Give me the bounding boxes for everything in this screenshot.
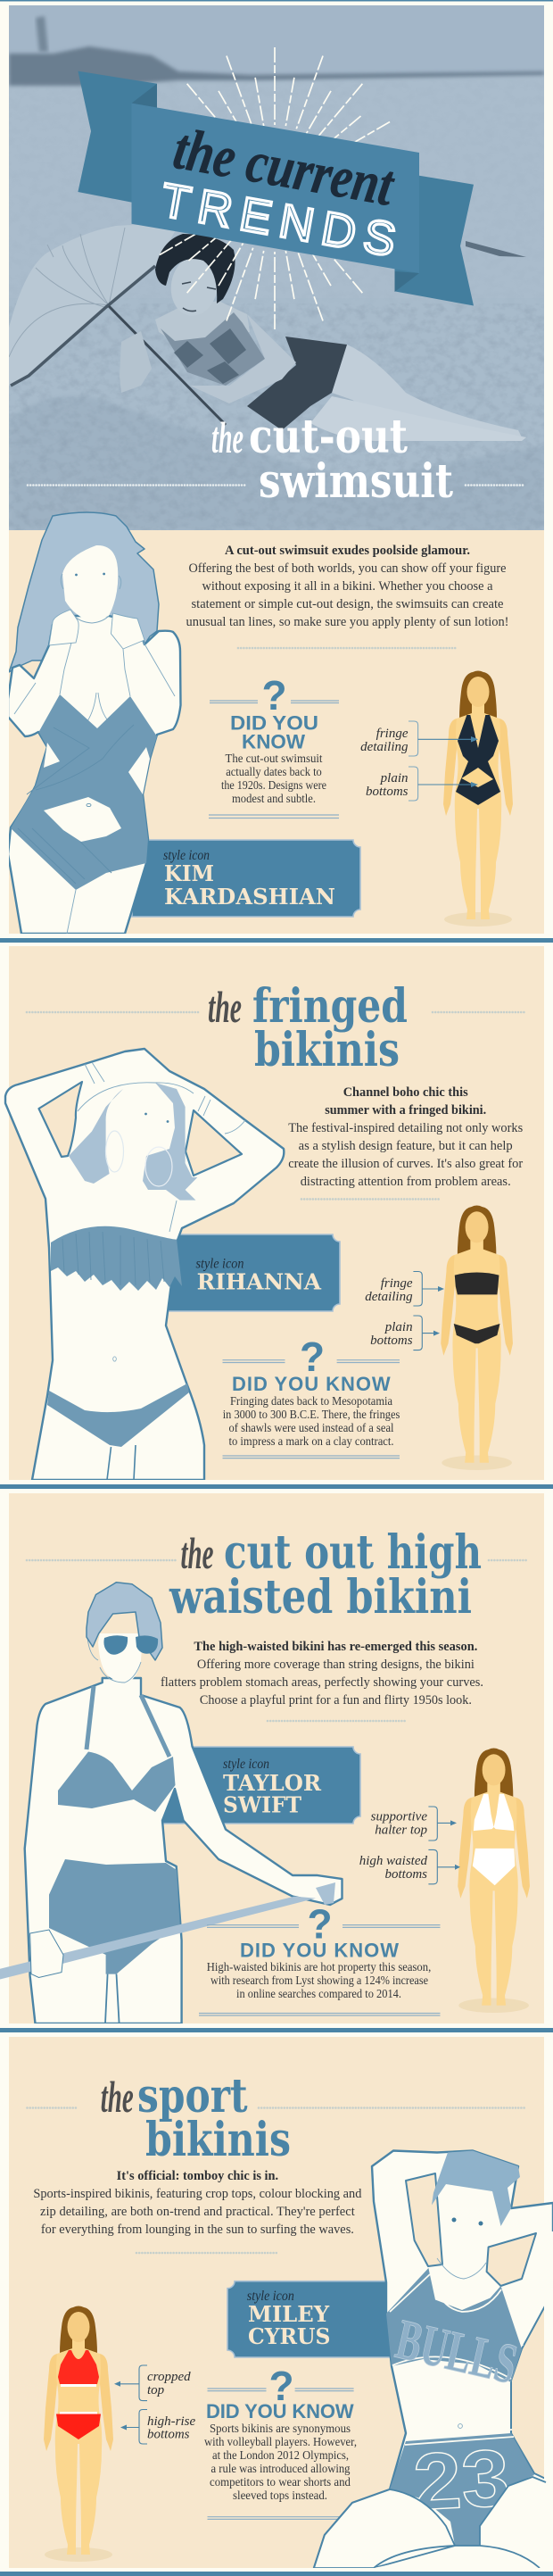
- panel: cut out high waisted bikini: [0, 1493, 544, 2023]
- did you know: sleeved tops instead.: [233, 2489, 327, 2502]
- callouts: plain: [384, 1320, 413, 1334]
- callouts: cropped: [147, 2370, 191, 2384]
- intro text: flatters problem stomach areas, perfectly showing your curves.: [161, 1675, 483, 1690]
- did you know: a rule was introduced allowing: [210, 2462, 351, 2475]
- did you know: [199, 1901, 441, 2015]
- callouts: bottoms: [147, 2428, 190, 2442]
- heading: the sport bikinis: bikinis: [145, 2113, 291, 2167]
- callouts: bottoms: [366, 785, 409, 799]
- style icon label: Rihanna: RIHANNA: [197, 1269, 321, 1295]
- style icon label: Kim Kardashian: [132, 840, 360, 917]
- intro text: for everything from lounging in the sun to surfing the waves.: [41, 2223, 354, 2237]
- ribbon banner: [78, 71, 474, 305]
- heading: the cut out high waisted bikini: cut out high: [224, 1525, 482, 1580]
- intro text: unusual tan lines, so make sure you apply plenty of sun lotion!: [186, 615, 508, 629]
- intro text: distracting attention from problem areas.: [301, 1175, 511, 1189]
- heading: the sport bikinis: [101, 2069, 291, 2167]
- small figure: cut-out swimsuit: [443, 671, 513, 927]
- style icon label: Taylor Swift: TAYLOR: [223, 1770, 322, 1796]
- callouts: [360, 721, 478, 801]
- callouts: [114, 2365, 196, 2444]
- callouts: top: [147, 2383, 165, 2397]
- heading: the cut out high waisted bikini: [169, 1525, 482, 1625]
- small figure: high waisted bikini: [458, 1749, 530, 2013]
- callouts: halter top: [375, 1824, 427, 1838]
- did you know: of shawls were used instead of a seal: [228, 1421, 394, 1434]
- heading: the sport bikinis: sport: [137, 2069, 248, 2123]
- illustration: Rihanna: [5, 1049, 284, 1480]
- intro text: [161, 1640, 483, 1708]
- intro text: [288, 1085, 524, 1189]
- illustration: Kim Kardashian: [8, 512, 180, 934]
- illustration: Taylor Swift: [0, 1583, 343, 2023]
- callouts: [365, 1271, 444, 1350]
- heading: the cut-out swimsuit: [212, 420, 453, 498]
- heading: the fringed bikinis: fringed: [252, 979, 408, 1034]
- intro text: The high-waisted bikini has re-emerged this season.: [194, 1640, 477, 1654]
- did you know: [204, 2363, 357, 2519]
- intro text: statement or simple cut-out design, the swimsuits can create: [191, 597, 503, 611]
- callouts: high waisted: [359, 1854, 427, 1868]
- intro text: Choose a playful print for a fun and flirty 1950s look.: [200, 1693, 472, 1708]
- did you know: Fringing dates back to Mesopotamia: [230, 1394, 392, 1408]
- callouts: bottoms: [384, 1867, 427, 1882]
- banner title: TRENDS: TRENDS: [157, 174, 400, 267]
- did you know: [223, 1334, 400, 1458]
- sunglasses: [103, 1635, 158, 1655]
- did you know: modest and subtle.: [232, 792, 316, 805]
- did you know: High-waisted bikinis are hot property this season,: [207, 1960, 431, 1974]
- style icon label: Taylor Swift: SWIFT: [223, 1792, 301, 1817]
- intro text: [33, 2169, 362, 2237]
- small figure: fringed bikini: [441, 1206, 513, 1470]
- did you know: to impress a mark on a clay contract.: [228, 1434, 394, 1448]
- intro text: Offering the best of both worlds, you can show off your figure: [189, 561, 507, 576]
- heading: the fringed bikinis: bikinis: [254, 1023, 400, 1077]
- did you know: the 1920s. Designs were: [221, 778, 326, 792]
- did you know: [209, 672, 339, 818]
- heading: the cut-out swimsuit: the: [211, 412, 243, 462]
- heading: the cut out high waisted bikini: waisted bikini: [169, 1570, 472, 1625]
- heading: the cut out high waisted bikini: the: [180, 1528, 214, 1578]
- intro text: without exposing it all in a bikini. Whether you choose a: [202, 579, 493, 594]
- heading: the sport bikinis: the: [101, 2072, 134, 2122]
- did you know: in 3000 to 300 B.C.E. There, the fringes: [223, 1408, 400, 1421]
- did you know: DID YOU KNOW: [232, 1373, 391, 1395]
- did you know: Sports bikinis are synonymous: [210, 2422, 351, 2435]
- did you know: with volleyball players. However,: [204, 2435, 357, 2448]
- style icon label: Taylor Swift: [162, 1747, 360, 1824]
- intro text: Offering more coverage than string designs, the bikini: [197, 1658, 475, 1672]
- intro text: The festival-inspired detailing not only works: [288, 1121, 524, 1135]
- heading: the fringed bikinis: [208, 979, 408, 1077]
- intro text: summer with a fringed bikini.: [325, 1103, 486, 1118]
- heading: the fringed bikinis: the: [208, 982, 242, 1032]
- panel: sport bikinis: [9, 2037, 553, 2568]
- intro text: [186, 544, 508, 629]
- style icon label: Miley Cyrus: style icon: [247, 2289, 294, 2304]
- style icon label: Kim Kardashian: style icon: [163, 848, 210, 863]
- callouts: supportive: [371, 1810, 427, 1824]
- style icon label: Rihanna: [164, 1234, 340, 1311]
- callouts: fringe: [381, 1276, 413, 1291]
- small figure: sport bikini: [44, 2306, 113, 2562]
- did you know: actually dates back to: [226, 765, 322, 778]
- umbrella: [9, 225, 226, 425]
- illustration: Miley Cyrus: [314, 2151, 553, 2568]
- style icon label: Rihanna: style icon: [196, 1257, 244, 1271]
- did you know: KNOW: [242, 731, 305, 753]
- did you know: competitors to wear shorts and: [210, 2475, 351, 2489]
- panel: cut-out swimsuit: [8, 512, 544, 934]
- did you know: ?: [268, 2363, 294, 2409]
- did you know: at the London 2012 Olympics,: [212, 2448, 349, 2462]
- did you know: ?: [308, 1901, 333, 1948]
- intro text: as a stylish design feature, but it can help: [299, 1139, 513, 1153]
- did you know: DID YOU: [230, 712, 318, 735]
- style icon label: Miley Cyrus: CYRUS: [248, 2323, 330, 2349]
- style icon label: Miley Cyrus: [227, 2281, 392, 2357]
- intro text: A cut-out swimsuit exudes poolside glamour.: [225, 544, 470, 558]
- banner title: the current: the current: [169, 116, 400, 219]
- callouts: high-rise: [147, 2414, 196, 2429]
- sunburst: [146, 47, 403, 329]
- intro text: It's official: tomboy chic is in.: [117, 2169, 278, 2183]
- style icon label: Taylor Swift: style icon: [223, 1757, 269, 1772]
- did you know: ?: [300, 1334, 325, 1380]
- panel: fringed bikinis: [5, 946, 544, 1480]
- callouts: plain: [380, 771, 409, 785]
- heading: the cut-out swimsuit: cut-out: [249, 410, 408, 464]
- callouts: [359, 1807, 460, 1884]
- callouts: bottoms: [370, 1334, 413, 1348]
- intro text: create the illusion of curves. It's also great for: [288, 1157, 523, 1171]
- callouts: detailing: [365, 1290, 413, 1304]
- did you know: DID YOU KNOW: [240, 1940, 399, 1962]
- intro text: Channel boho chic this: [343, 1085, 468, 1100]
- style icon label: Kim Kardashian: KIM: [164, 860, 214, 886]
- did you know: The cut-out swimsuit: [225, 752, 323, 765]
- intro text: zip detailing, are both on-trend and practical. They're perfect: [40, 2205, 355, 2219]
- style icon label: Miley Cyrus: MILEY: [248, 2301, 330, 2327]
- woman: [120, 234, 526, 441]
- callouts: detailing: [360, 740, 409, 754]
- did you know: ?: [261, 672, 287, 719]
- style icon label: Kim Kardashian: KARDASHIAN: [164, 884, 335, 910]
- shorts number: 23: [411, 2433, 512, 2528]
- did you know: with research from Lyst showing a 124% increase: [210, 1974, 428, 1987]
- did you know: in online searches compared to 2014.: [236, 1987, 401, 2000]
- callouts: fringe: [376, 727, 409, 741]
- did you know: DID YOU KNOW: [206, 2400, 354, 2422]
- intro text: Sports-inspired bikinis, featuring crop tops, colour blocking and: [33, 2187, 362, 2201]
- heading: the cut-out swimsuit: swimsuit: [259, 454, 453, 509]
- panel: hero photo: [9, 5, 544, 530]
